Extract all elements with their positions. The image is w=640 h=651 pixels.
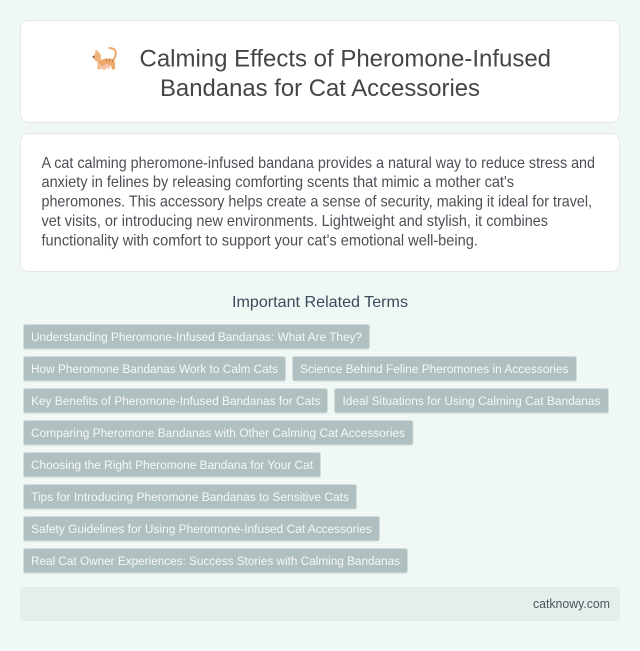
icon: cat xyxy=(93,48,116,70)
tag: comparing xyxy=(24,420,413,445)
tag: safety xyxy=(24,516,380,541)
tag: choosing xyxy=(24,452,320,477)
tag: safety: Safety Guidelines for Using Pheromone-Infused Cat Accessories xyxy=(31,522,372,536)
heading: related terms: Important Related Terms xyxy=(232,294,408,311)
tag: how it works xyxy=(24,356,286,381)
tag: science xyxy=(292,356,576,381)
tag: experiences: Real Cat Owner Experiences: Success Stories with Calming Bandanas xyxy=(31,554,400,568)
footer xyxy=(20,587,620,621)
title: Calming Effects of Pheromone-Infused xyxy=(140,46,551,72)
text block: description: anxiety in felines by releasing comforting scents that mimic a mother cat's xyxy=(42,174,514,191)
footer: catknowy.com xyxy=(533,597,610,611)
tag: ideal situations xyxy=(334,388,608,413)
tag: tips: Tips for Introducing Pheromone Bandanas to Sensitive Cats xyxy=(31,490,349,504)
tag: tips xyxy=(24,484,356,509)
text block: description: pheromones. This accessory helps create a sense of security, making it ideal for travel, xyxy=(42,194,592,211)
tag: understanding xyxy=(24,324,370,349)
title xyxy=(140,46,551,102)
panel: description xyxy=(20,134,620,272)
tag: understanding: Understanding Pheromone-Infused Bandanas: What Are They? xyxy=(31,330,362,344)
tag: science: Science Behind Feline Pheromones in Accessories xyxy=(300,362,568,376)
tag: how it works: How Pheromone Bandanas Work to Calm Cats xyxy=(31,362,278,376)
tag: choosing: Choosing the Right Pheromone Bandana for Your Cat xyxy=(31,458,314,472)
tag: key benefits: Key Benefits of Pheromone-Infused Bandanas for Cats xyxy=(31,394,320,408)
tag: ideal situations: Ideal Situations for Using Calming Cat Bandanas xyxy=(342,394,600,408)
tag: key benefits xyxy=(24,388,328,413)
tag: experiences xyxy=(24,548,408,573)
text block: description: functionality with comfort to support your cat's emotional well-being. xyxy=(42,232,478,250)
title: Bandanas for Cat Accessories xyxy=(160,75,480,102)
tag: comparing: Comparing Pheromone Bandanas with Other Calming Cat Accessories xyxy=(31,426,405,440)
text block: description: vet visits, or introducing new environments. Lightweight and stylish, it combines xyxy=(42,213,548,230)
text block: description xyxy=(42,155,595,250)
panel: header xyxy=(20,20,620,122)
